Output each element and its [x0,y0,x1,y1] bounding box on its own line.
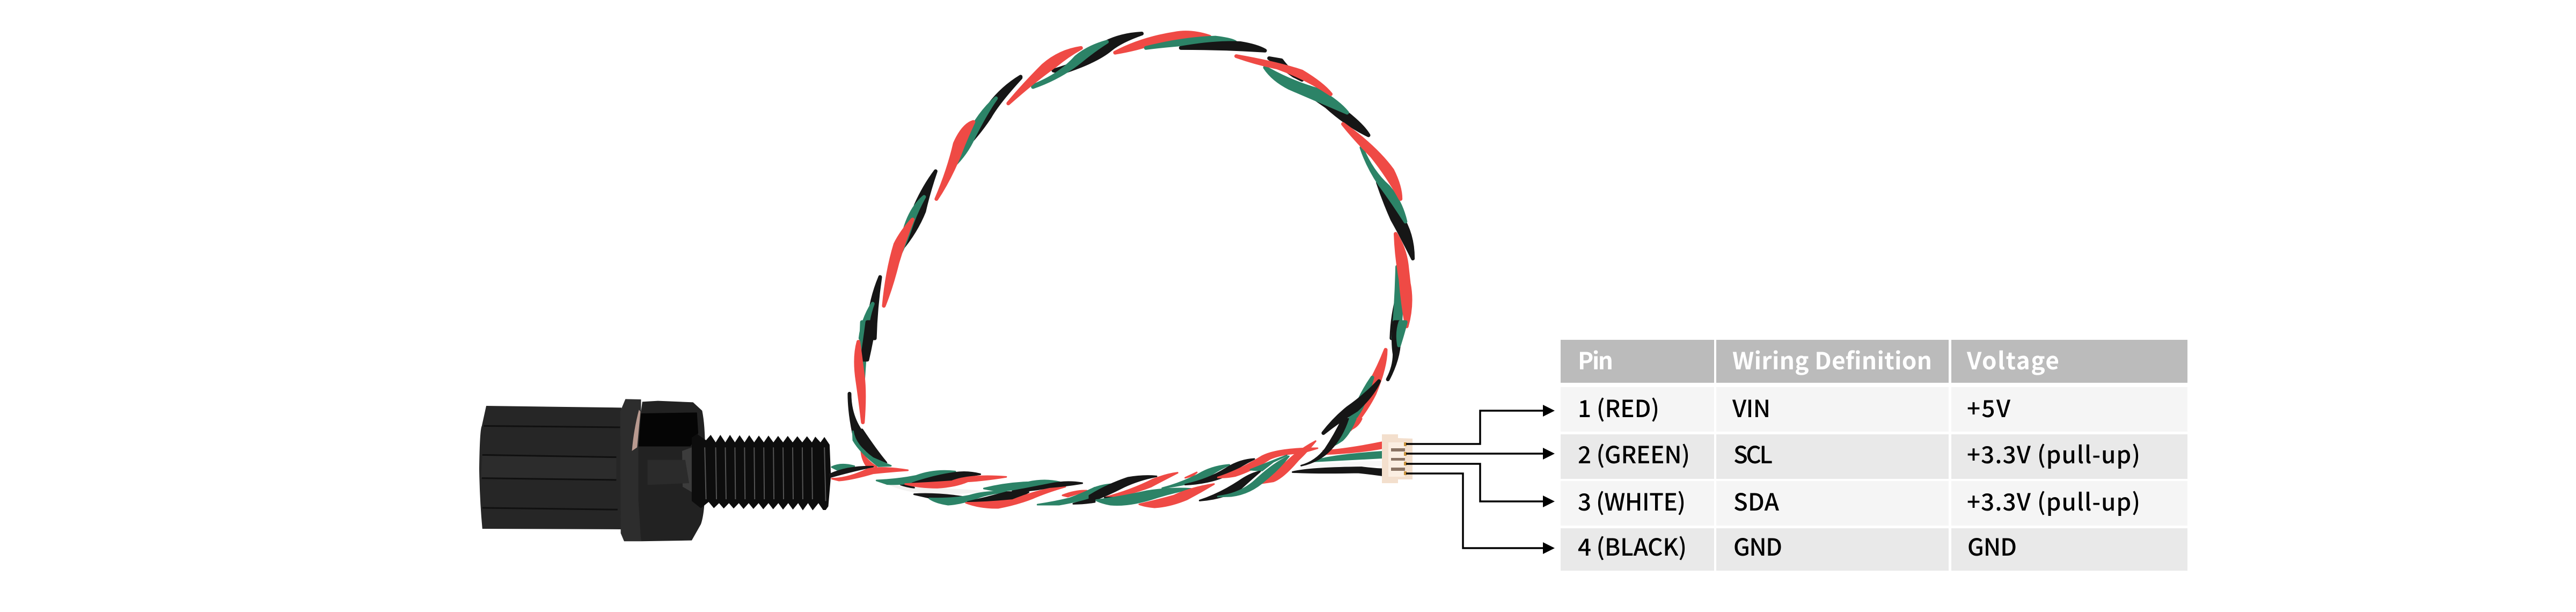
JST connector [1382,434,1413,483]
row 3: white SDA: 3 (WHITE) [1578,483,1686,518]
twisted cable: lower left bundle [830,429,1095,508]
row 4: black GND [1561,528,2187,571]
row 2: green SCL: SCL [1733,436,1773,470]
thread [692,434,831,511]
table header row: Wiring Definition [1732,342,1932,376]
arrow: pin 1 to table row 1 [1406,405,1555,444]
flange ring [620,399,641,541]
arrow: pin 3 to table row 3 [1406,464,1555,507]
row 2: green SCL: 2 (GREEN) [1578,436,1690,470]
row 3: white SDA: +3.3V (pull-up) [1967,483,2140,518]
table header row [1561,340,2187,383]
hex nut [639,401,705,541]
row 1: red VIN [1561,387,2187,432]
pin definition table [1561,340,2187,571]
row 4: black GND: GND [1967,528,2017,563]
row 2: green SCL: +3.3V (pull-up) [1967,436,2140,470]
twisted cable: upper loop [860,33,1413,338]
knurled grip body [479,406,621,529]
row 1: red VIN: 1 (RED) [1578,390,1659,424]
sensor: threaded black connector [479,399,831,541]
row 4: black GND: 4 (BLACK) [1578,528,1687,563]
row 1: red VIN: +5V [1967,390,2011,424]
row 2: green SCL [1561,434,2187,479]
row 3: white SDA [1561,481,2187,526]
arrow: pin 2 to table row 2 [1406,448,1555,460]
arrow: pin 4 to table row 4 [1406,473,1555,554]
table header row: Pin [1578,342,1613,376]
twisted cable: lower right bundle [1089,419,1382,507]
twisted cable: side descents [850,322,1406,440]
row 4: black GND: GND [1733,528,1782,563]
row 1: red VIN: VIN [1732,390,1770,424]
table header row: Voltage [1966,342,2059,376]
row 3: white SDA: SDA [1733,483,1780,518]
